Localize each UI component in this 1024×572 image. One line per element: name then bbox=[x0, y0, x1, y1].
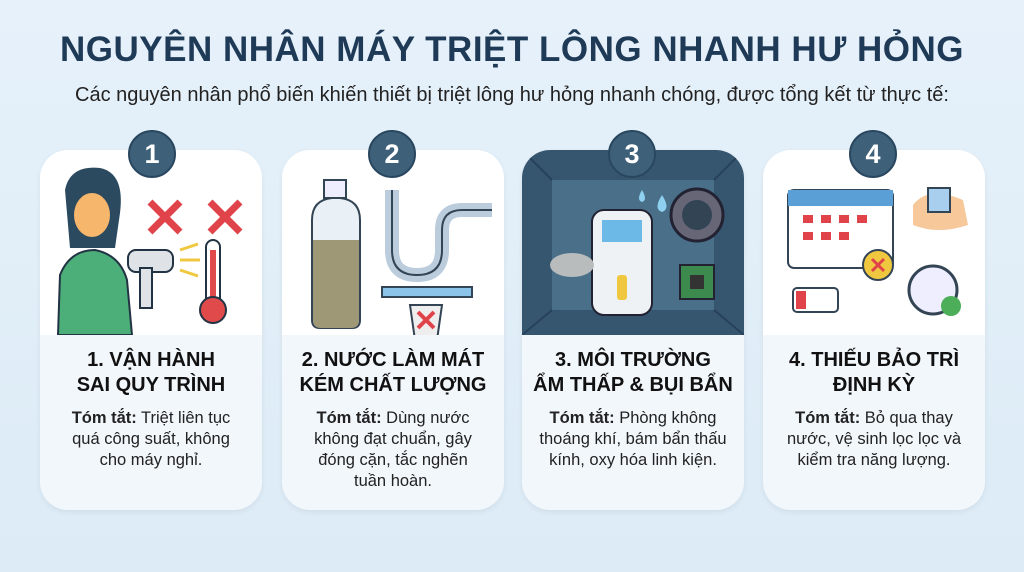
panel: card 2 bbox=[282, 150, 504, 510]
heading bbox=[789, 348, 959, 396]
number badge 4: 4 bbox=[865, 139, 881, 169]
subtitle: Các nguyên nhân phổ biến khiến thiết bị triệt lông hư hỏng nhanh chóng, được tổng kết từ thực tế: bbox=[75, 84, 949, 106]
heading: ĐỊNH KỲ bbox=[833, 374, 915, 396]
summary text: Tóm tắt: Dùng nước không đạt chuẩn, gây đóng cặn, tắc nghẽn tuần hoàn. bbox=[314, 409, 472, 490]
heading: 3. MÔI TRƯỜNG bbox=[555, 349, 711, 371]
number badge 3: 3 bbox=[624, 139, 640, 169]
heading: KÉM CHẤT LƯỢNG bbox=[300, 374, 486, 396]
title: NGUYÊN NHÂN MÁY TRIỆT LÔNG NHANH HƯ HỎNG bbox=[60, 30, 964, 69]
panel: card 1 bbox=[40, 150, 262, 510]
heading: 2. NƯỚC LÀM MÁT bbox=[302, 349, 484, 371]
number badge 4 bbox=[849, 130, 897, 178]
heading: SAI QUY TRÌNH bbox=[77, 374, 225, 396]
heading: ẨM THẤP & BỤI BẨN bbox=[533, 374, 733, 396]
number badge 2 bbox=[368, 130, 416, 178]
icon: humid dusty room bbox=[522, 150, 744, 335]
summary text bbox=[539, 408, 727, 469]
icon: operator with device bbox=[40, 150, 262, 335]
number badge 1 bbox=[128, 130, 176, 178]
icon: maintenance calendar bbox=[763, 150, 985, 335]
number badge 3 bbox=[608, 130, 656, 178]
summary text: thoáng khí, bám bẩn thấu kính, oxy hóa linh kiện. bbox=[539, 430, 727, 469]
icon: dirty water bottle and pipe bbox=[282, 150, 504, 335]
heading bbox=[533, 348, 733, 396]
heading bbox=[77, 348, 225, 396]
panel: card 3 bbox=[522, 150, 744, 510]
heading bbox=[300, 348, 486, 396]
summary text: Tóm tắt: Bỏ qua thay nước, vệ sinh lọc lọc và kiểm tra năng lượng. bbox=[787, 409, 961, 469]
summary text: Tóm tắt: Phòng không bbox=[550, 409, 716, 427]
panel: card 4 bbox=[763, 150, 985, 510]
number badge 2: 2 bbox=[384, 139, 400, 169]
heading: 1. VẬN HÀNH bbox=[87, 349, 215, 371]
heading: 4. THIẾU BẢO TRÌ bbox=[789, 349, 959, 371]
number badge 1: 1 bbox=[144, 139, 160, 169]
summary text: Tóm tắt: Triệt liên tục quá công suất, không cho máy nghỉ. bbox=[72, 409, 230, 469]
